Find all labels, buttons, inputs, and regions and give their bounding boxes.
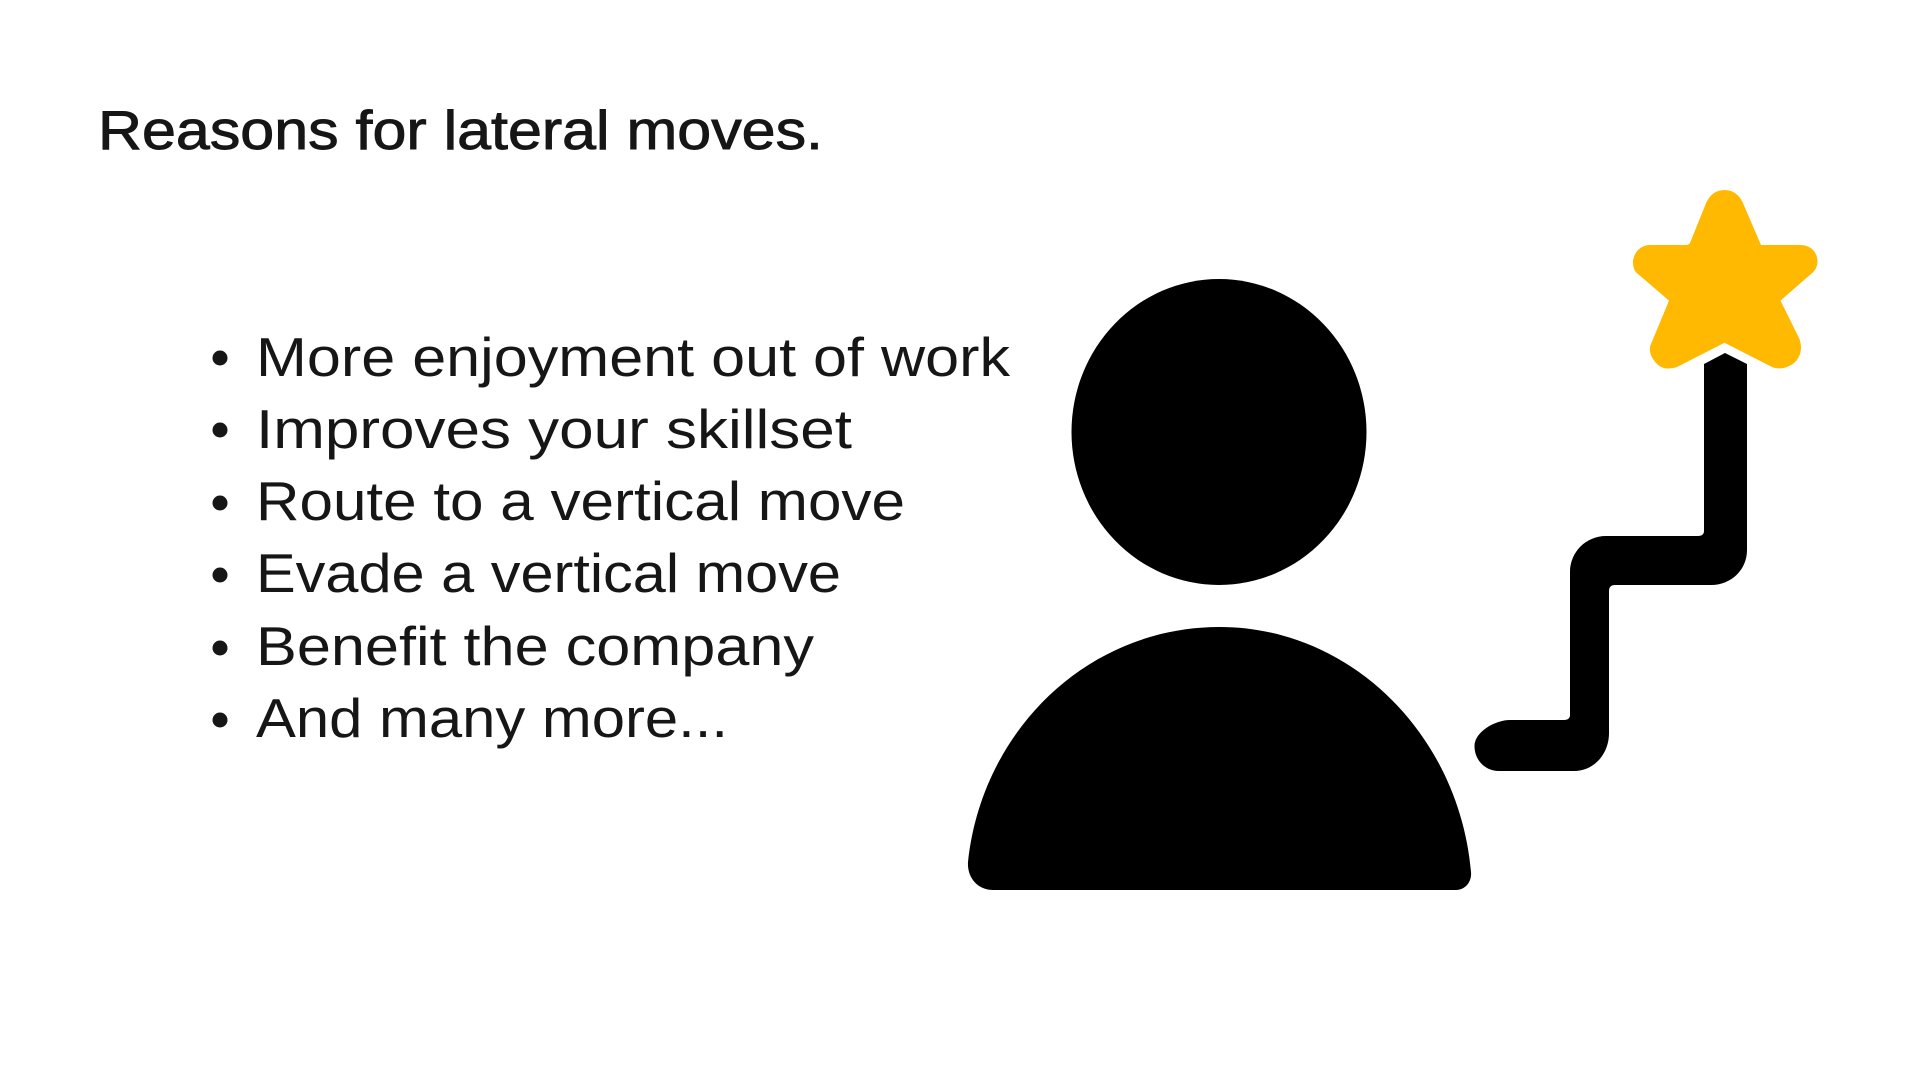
stepped career path — [1474, 353, 1747, 771]
bullet item: more: And many more... — [256, 687, 728, 749]
bullet item: evade: Evade a vertical move — [256, 542, 841, 604]
icon: person with career path to star — [968, 190, 1818, 890]
star — [1633, 190, 1818, 369]
bullet item: skillset: Improves your skillset — [256, 398, 852, 460]
bullet item: benefit: Benefit the company — [256, 615, 815, 677]
bullet item: route: Route to a vertical move — [256, 470, 905, 532]
person body — [968, 627, 1471, 890]
bullet item: enjoyment: More enjoyment out of work — [256, 326, 1011, 388]
bullet list — [212, 326, 1011, 749]
title: Reasons for lateral moves. — [98, 99, 823, 161]
person head — [1072, 279, 1366, 585]
